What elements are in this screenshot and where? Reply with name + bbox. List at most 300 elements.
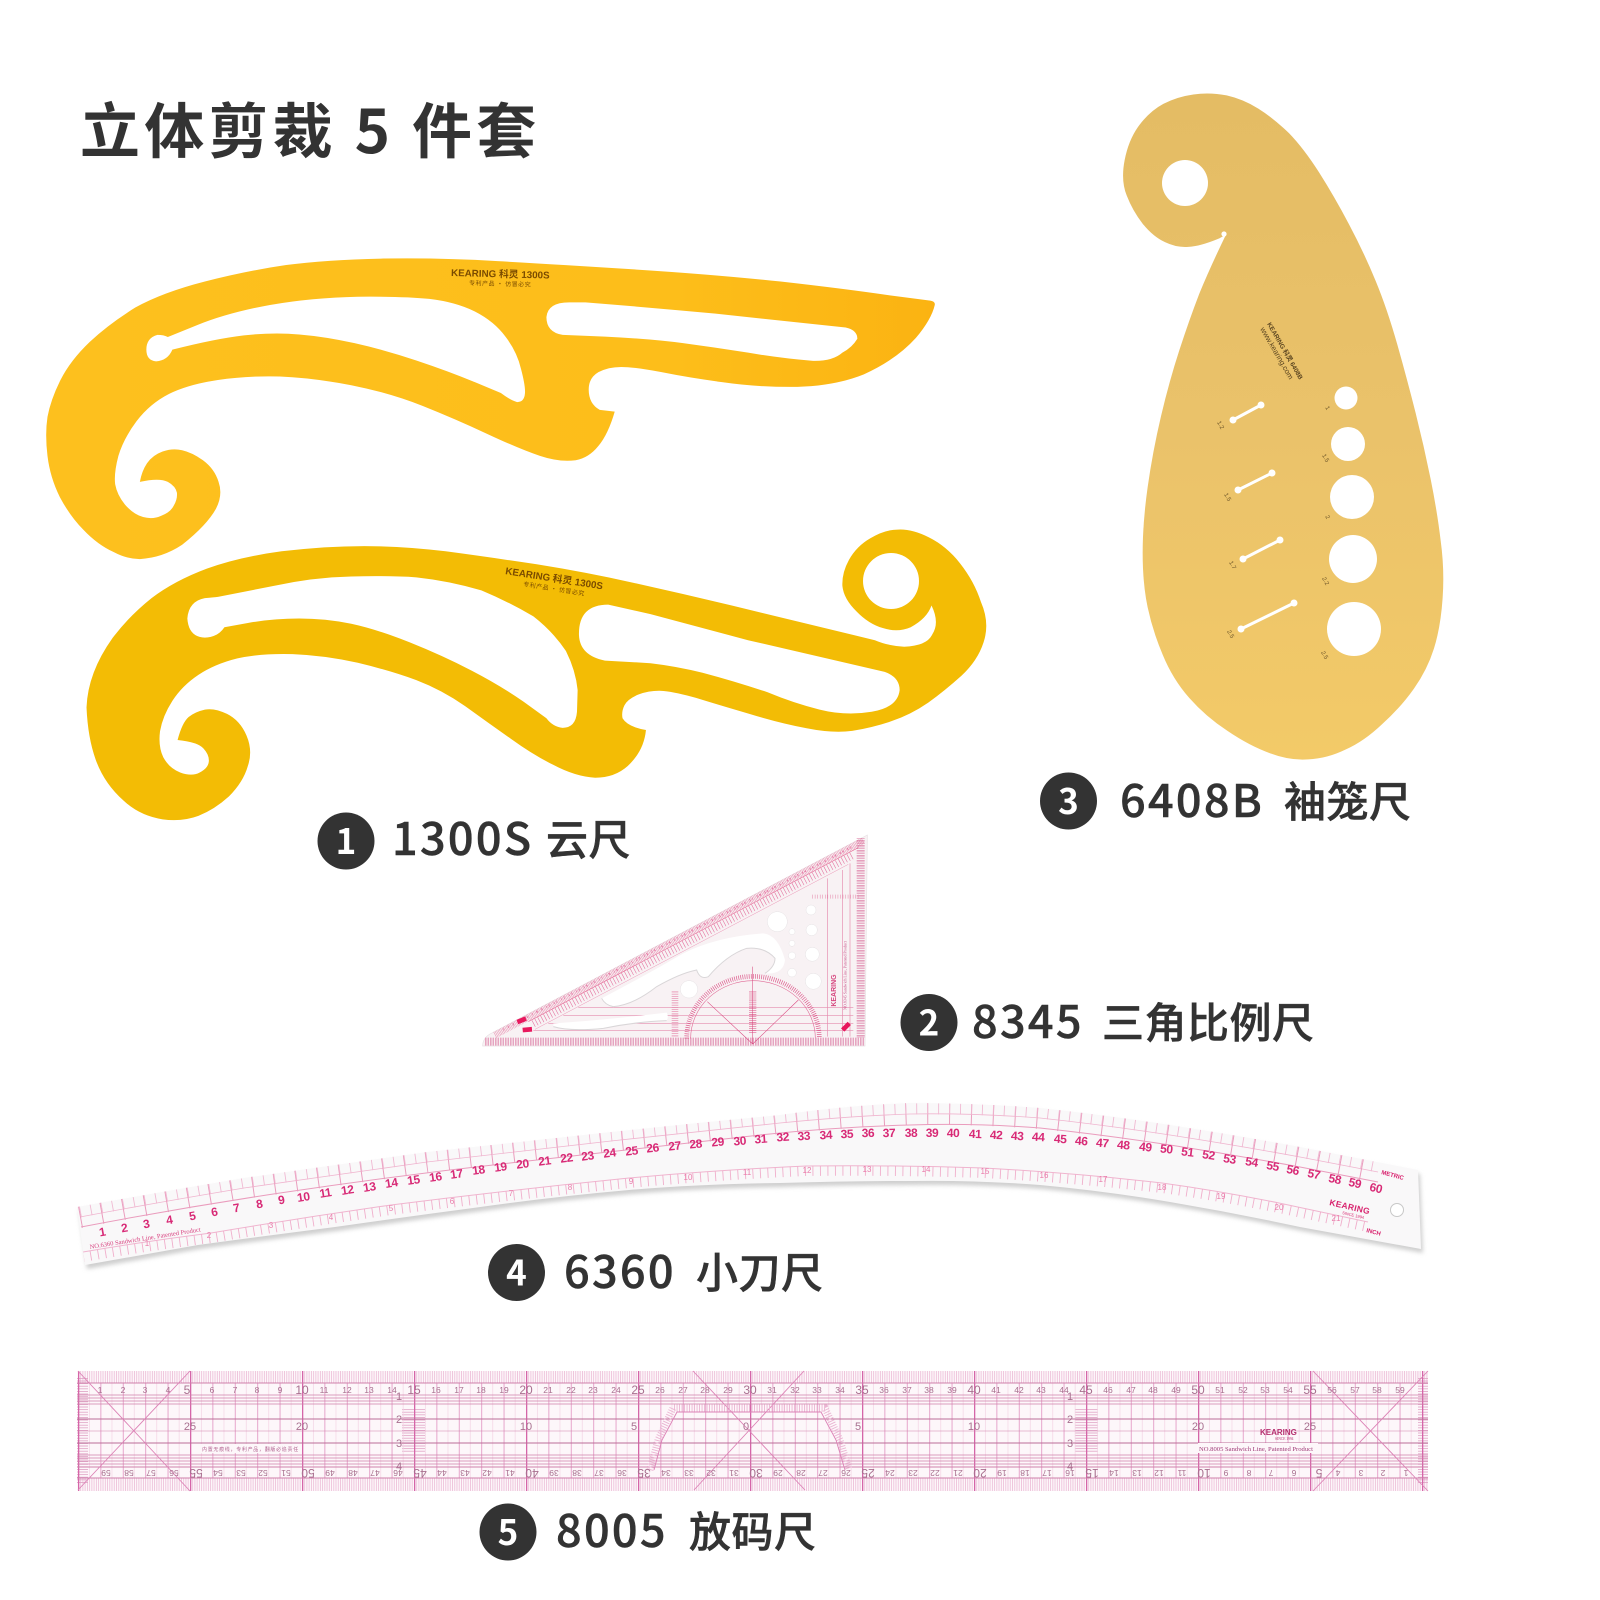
size labels: 2.2 bbox=[1320, 576, 1330, 587]
top numbers: 7 bbox=[233, 1385, 238, 1395]
centimetre numbers: 25 bbox=[625, 1143, 639, 1159]
inch numbers: 19 bbox=[1217, 1192, 1226, 1201]
top numbers: 44 bbox=[1059, 1385, 1069, 1395]
bottom inverted numbers: 15 bbox=[1085, 1466, 1099, 1480]
top numbers: 21 bbox=[543, 1385, 553, 1395]
inch numbers: 4 bbox=[329, 1213, 334, 1222]
middle inch numbers: 3 bbox=[1067, 1438, 1073, 1450]
centimetre numbers: 9 bbox=[277, 1192, 286, 1207]
bottom inverted numbers bbox=[101, 1466, 1408, 1480]
label 4: 小刀尺 bbox=[696, 1240, 824, 1301]
centimetre numbers: 38 bbox=[905, 1126, 918, 1140]
centimetre numbers: 33 bbox=[797, 1129, 811, 1143]
bottom inverted numbers: 55 bbox=[189, 1466, 203, 1480]
inch numbers: 15 bbox=[981, 1167, 990, 1176]
ring hole bbox=[863, 553, 919, 609]
label 2 bbox=[900, 986, 1315, 1051]
inch numbers: 20 bbox=[1275, 1203, 1284, 1212]
top numbers: 17 bbox=[454, 1385, 464, 1395]
bottom inverted numbers: 32 bbox=[706, 1468, 716, 1478]
top numbers: 13 bbox=[364, 1385, 374, 1395]
model text: NO.8345 Sandwich Line, Patented Product bbox=[843, 940, 849, 1010]
centimetre numbers: 50 bbox=[1159, 1141, 1174, 1157]
top numbers: 6 bbox=[210, 1385, 215, 1395]
top numbers: 32 bbox=[790, 1385, 800, 1395]
since text: SINCE 1994 bbox=[1342, 1210, 1365, 1220]
bottom inverted numbers: 11 bbox=[1177, 1468, 1186, 1478]
middle inch numbers: 4 bbox=[396, 1461, 402, 1473]
title: 立体剪裁 5 件套 bbox=[80, 84, 540, 171]
middle inch numbers: 5 bbox=[631, 1421, 637, 1433]
inch numbers bbox=[145, 1165, 1341, 1248]
top numbers: 14 bbox=[387, 1385, 397, 1395]
middle inch numbers: 10 bbox=[520, 1421, 532, 1433]
middle inch numbers: 3 bbox=[396, 1438, 402, 1450]
top numbers: 4 bbox=[166, 1385, 171, 1395]
website text: www.kearing.com bbox=[1258, 325, 1295, 381]
top numbers: 15 bbox=[407, 1383, 421, 1397]
top numbers: 36 bbox=[879, 1385, 889, 1395]
bottom inverted numbers: 50 bbox=[301, 1466, 315, 1480]
top numbers bbox=[98, 1383, 1405, 1397]
bottom inverted numbers: 37 bbox=[594, 1468, 604, 1478]
label 3: 6408B bbox=[1120, 765, 1264, 830]
protractor bbox=[650, 1408, 849, 1470]
centimetre numbers: 58 bbox=[1327, 1171, 1343, 1187]
centimetre numbers: 1 bbox=[98, 1224, 107, 1239]
size labels: 1.5 bbox=[1320, 453, 1330, 464]
label 5: 5 bbox=[498, 1505, 518, 1556]
bottom inverted numbers: 28 bbox=[796, 1468, 806, 1478]
bottom inverted numbers: 5 bbox=[1315, 1466, 1322, 1480]
top numbers: 20 bbox=[519, 1383, 533, 1397]
bottom inverted numbers: 8 bbox=[1246, 1468, 1251, 1478]
size labels bbox=[1215, 406, 1331, 661]
label 5: 放码尺 bbox=[689, 1499, 817, 1560]
top numbers: 19 bbox=[499, 1385, 509, 1395]
top numbers: 42 bbox=[1014, 1385, 1024, 1395]
centimetre numbers: 42 bbox=[990, 1128, 1003, 1142]
centimetre numbers: 14 bbox=[384, 1175, 399, 1191]
centimetre numbers: 21 bbox=[537, 1153, 552, 1169]
centimetre numbers: 13 bbox=[362, 1179, 377, 1195]
label 1: 云尺 bbox=[546, 807, 631, 868]
inch numbers: 10 bbox=[684, 1173, 693, 1182]
bottom inverted numbers: 36 bbox=[617, 1468, 627, 1478]
shadow bbox=[79, 1107, 1423, 1269]
centimetre numbers: 36 bbox=[862, 1126, 875, 1140]
centimetre numbers: 35 bbox=[840, 1127, 854, 1141]
centimetre numbers: 8 bbox=[255, 1196, 264, 1211]
centimetre numbers: 26 bbox=[646, 1140, 660, 1156]
top numbers: 9 bbox=[278, 1385, 283, 1395]
top numbers: 30 bbox=[743, 1383, 757, 1397]
size labels: 2.5 bbox=[1225, 629, 1235, 640]
centimetre numbers: 32 bbox=[776, 1130, 790, 1144]
top numbers: 37 bbox=[902, 1385, 912, 1395]
notch bbox=[1221, 231, 1227, 237]
centimetre numbers: 55 bbox=[1265, 1158, 1281, 1174]
label 2: 三角比例尺 bbox=[1102, 990, 1315, 1051]
caption on upper ruler: 专利产品 · 仿冒必究 bbox=[469, 278, 531, 289]
centimetre numbers: 44 bbox=[1032, 1130, 1046, 1144]
middle inch numbers: 10 bbox=[968, 1421, 980, 1433]
centimetre numbers: 29 bbox=[711, 1134, 725, 1150]
top numbers: 22 bbox=[566, 1385, 576, 1395]
inch numbers: 11 bbox=[743, 1168, 752, 1177]
panel: 8005 grading ruler bbox=[77, 1371, 1428, 1491]
top numbers: 1 bbox=[98, 1385, 103, 1395]
bottom inverted numbers: 17 bbox=[1042, 1468, 1052, 1478]
bottom inverted numbers: 14 bbox=[1109, 1468, 1119, 1478]
top numbers: 53 bbox=[1260, 1385, 1270, 1395]
size labels: 1 bbox=[1323, 406, 1331, 412]
top numbers: 51 bbox=[1215, 1385, 1225, 1395]
centimetre numbers: 24 bbox=[602, 1145, 617, 1161]
bottom inverted numbers: 48 bbox=[348, 1468, 358, 1478]
bottom inverted numbers: 30 bbox=[749, 1466, 763, 1480]
inch numbers: 5 bbox=[389, 1204, 394, 1213]
top numbers: 40 bbox=[967, 1383, 981, 1397]
centimetre numbers bbox=[98, 1126, 1384, 1239]
bottom inverted numbers: 29 bbox=[773, 1468, 783, 1478]
top numbers: 38 bbox=[924, 1385, 934, 1395]
top numbers: 43 bbox=[1036, 1385, 1046, 1395]
centimetre numbers: 28 bbox=[689, 1136, 703, 1152]
top numbers: 10 bbox=[295, 1383, 309, 1397]
bottom inverted numbers: 25 bbox=[861, 1466, 875, 1480]
top numbers: 41 bbox=[991, 1385, 1001, 1395]
centimetre numbers: 30 bbox=[733, 1134, 747, 1148]
centimetre numbers: 2 bbox=[120, 1220, 129, 1235]
centimetre numbers: 53 bbox=[1222, 1151, 1238, 1167]
brand text: KEARING 科灵 6408B bbox=[1265, 320, 1306, 381]
bottom inverted numbers: 56 bbox=[169, 1468, 179, 1478]
inch numbers: 17 bbox=[1099, 1175, 1108, 1184]
bottom inverted numbers: 40 bbox=[525, 1466, 539, 1480]
top numbers: 28 bbox=[700, 1385, 710, 1395]
top numbers: 58 bbox=[1372, 1385, 1382, 1395]
inch numbers: 16 bbox=[1040, 1171, 1049, 1180]
top numbers: 52 bbox=[1238, 1385, 1248, 1395]
top numbers: 11 bbox=[320, 1385, 329, 1395]
centimetre numbers: 10 bbox=[296, 1189, 311, 1205]
brand text on lower ruler: KEARING 科灵 1300S bbox=[505, 564, 604, 592]
triangle body bbox=[483, 835, 867, 1046]
bottom inverted numbers: 6 bbox=[1291, 1468, 1296, 1478]
label 2: 2 bbox=[919, 996, 939, 1046]
middle inch numbers bbox=[184, 1391, 1316, 1473]
label 3: 袖笼尺 bbox=[1284, 769, 1412, 830]
bottom inverted numbers: 52 bbox=[258, 1468, 268, 1478]
panel: 8345 triangle scale ruler bbox=[482, 834, 868, 1046]
bottom inverted numbers: 13 bbox=[1132, 1468, 1142, 1478]
inch label: INCH bbox=[1365, 1228, 1381, 1238]
centimetre numbers: 46 bbox=[1075, 1134, 1089, 1148]
panel: 6360 curved ruler bbox=[77, 1103, 1423, 1269]
centimetre numbers: 22 bbox=[559, 1150, 574, 1166]
top numbers: 39 bbox=[947, 1385, 957, 1395]
top numbers: 49 bbox=[1171, 1385, 1181, 1395]
inch numbers: 8 bbox=[568, 1183, 573, 1192]
label 1: 1300S bbox=[392, 803, 533, 868]
brand text: KEARING bbox=[1329, 1197, 1371, 1216]
inch numbers: 14 bbox=[922, 1165, 931, 1174]
metric and inch scales bbox=[80, 1109, 1378, 1257]
bottom inverted numbers: 54 bbox=[213, 1468, 223, 1478]
inch numbers: 1 bbox=[145, 1239, 150, 1248]
top numbers: 18 bbox=[476, 1385, 486, 1395]
centimetre numbers: 54 bbox=[1244, 1154, 1260, 1170]
top numbers: 34 bbox=[835, 1385, 845, 1395]
centimetre numbers: 4 bbox=[165, 1212, 174, 1227]
panel: lower 1300S curve ruler bbox=[87, 530, 986, 820]
inch numbers: 13 bbox=[863, 1165, 872, 1174]
size labels: 1.7 bbox=[1227, 560, 1237, 571]
centimetre numbers: 41 bbox=[969, 1127, 982, 1141]
top numbers: 5 bbox=[184, 1383, 191, 1397]
top numbers: 59 bbox=[1395, 1385, 1405, 1395]
top numbers: 55 bbox=[1303, 1383, 1317, 1397]
cutout shadows bbox=[553, 948, 775, 1030]
centimetre numbers: 6 bbox=[210, 1204, 219, 1219]
red marks bbox=[516, 1016, 851, 1032]
top numbers: 35 bbox=[855, 1383, 869, 1397]
panel: 6408B armhole ruler bbox=[1123, 93, 1443, 760]
centimetre numbers: 37 bbox=[883, 1126, 896, 1140]
bottom inverted numbers: 27 bbox=[818, 1468, 828, 1478]
bottom inverted numbers: 12 bbox=[1154, 1468, 1164, 1478]
bottom inverted numbers: 43 bbox=[460, 1468, 470, 1478]
centimetre numbers: 16 bbox=[428, 1169, 443, 1185]
label 1 bbox=[318, 803, 631, 870]
top numbers: 8 bbox=[255, 1385, 260, 1395]
ruler model text: NO.6360 Sandwich Line, Patented Product bbox=[89, 1226, 201, 1251]
bottom inverted numbers: 34 bbox=[661, 1468, 671, 1478]
scale lines bbox=[533, 863, 853, 1037]
centimetre numbers: 39 bbox=[926, 1126, 939, 1140]
centimetre numbers: 34 bbox=[819, 1128, 833, 1142]
top numbers: 3 bbox=[143, 1385, 148, 1395]
brand text: KEARING bbox=[831, 974, 838, 1007]
inch numbers: 18 bbox=[1158, 1183, 1167, 1192]
round holes bbox=[680, 905, 821, 998]
bottom inverted numbers: 53 bbox=[236, 1468, 246, 1478]
top numbers: 23 bbox=[588, 1385, 598, 1395]
centimetre numbers: 49 bbox=[1138, 1139, 1153, 1155]
size labels: 1.5 bbox=[1222, 492, 1232, 503]
bottom inverted numbers: 49 bbox=[325, 1468, 335, 1478]
bottom inverted numbers: 57 bbox=[146, 1468, 156, 1478]
centimetre numbers: 17 bbox=[449, 1166, 464, 1182]
top numbers: 50 bbox=[1191, 1383, 1205, 1397]
label 4: 4 bbox=[506, 1246, 527, 1296]
hypotenuse scales bbox=[485, 838, 865, 1042]
top numbers: 46 bbox=[1103, 1385, 1113, 1395]
size labels: 2.5 bbox=[1319, 650, 1329, 661]
middle inch numbers: 25 bbox=[184, 1421, 196, 1433]
inch numbers: 21 bbox=[1332, 1214, 1341, 1223]
bottom inverted numbers: 22 bbox=[930, 1468, 940, 1478]
label 3: 3 bbox=[1058, 774, 1079, 825]
bottom inverted numbers: 51 bbox=[281, 1468, 291, 1478]
top numbers: 2 bbox=[121, 1385, 126, 1395]
bottom inverted numbers: 59 bbox=[101, 1468, 111, 1478]
centimetre numbers: 7 bbox=[232, 1200, 241, 1215]
bottom inverted numbers: 3 bbox=[1358, 1468, 1363, 1478]
bottom inverted numbers: 24 bbox=[885, 1468, 895, 1478]
label 1: 1 bbox=[336, 814, 356, 865]
centimetre numbers: 19 bbox=[493, 1159, 508, 1175]
top numbers: 25 bbox=[631, 1383, 645, 1397]
ruler body bbox=[77, 1103, 1421, 1265]
chinese note: 内置无痕线，专利产品，翻版必追责任 bbox=[202, 1446, 299, 1453]
inch numbers: 12 bbox=[803, 1166, 812, 1175]
inch numbers: 6 bbox=[450, 1197, 455, 1206]
brand text on upper ruler: KEARING 科灵 1300S bbox=[451, 266, 550, 282]
middle inch numbers: 20 bbox=[1192, 1421, 1204, 1433]
caption on lower ruler: 专利产品 · 仿冒必究 bbox=[523, 579, 586, 598]
ruler body bbox=[77, 1371, 1428, 1491]
centimetre numbers: 59 bbox=[1347, 1175, 1363, 1191]
bottom inverted numbers: 42 bbox=[482, 1468, 492, 1478]
metric label: METRIC bbox=[1380, 1170, 1405, 1182]
centimetre numbers: 56 bbox=[1285, 1162, 1301, 1178]
top numbers: 45 bbox=[1079, 1383, 1093, 1397]
bottom inverted numbers: 26 bbox=[841, 1468, 851, 1478]
curve cutouts bbox=[553, 933, 785, 1030]
label 5: 8005 bbox=[556, 1495, 668, 1560]
since text: SINCE 1994 bbox=[1275, 1437, 1294, 1441]
centimetre numbers: 52 bbox=[1201, 1147, 1216, 1163]
bottom inverted numbers: 23 bbox=[908, 1468, 918, 1478]
round holes bbox=[1327, 386, 1381, 656]
model text: NO.8005 Sandwich Line, Patented Product bbox=[1199, 1446, 1313, 1453]
bottom inverted numbers: 41 bbox=[505, 1468, 515, 1478]
centimetre numbers: 40 bbox=[947, 1126, 960, 1140]
protractor bbox=[675, 967, 819, 1044]
middle inch numbers: 1 bbox=[1067, 1391, 1073, 1403]
bottom inverted numbers: 10 bbox=[1197, 1466, 1211, 1480]
bottom inverted numbers: 9 bbox=[1223, 1468, 1228, 1478]
label 5 bbox=[480, 1495, 817, 1560]
top numbers: 56 bbox=[1327, 1385, 1337, 1395]
top numbers: 33 bbox=[812, 1385, 822, 1395]
bottom inverted numbers: 31 bbox=[729, 1468, 739, 1478]
inch numbers: 2 bbox=[207, 1231, 212, 1240]
centimetre numbers: 31 bbox=[754, 1132, 768, 1146]
bottom inverted numbers: 1 bbox=[1403, 1468, 1408, 1478]
top numbers: 47 bbox=[1126, 1385, 1136, 1395]
centimetre numbers: 20 bbox=[515, 1156, 530, 1172]
bottom inverted numbers: 16 bbox=[1065, 1468, 1075, 1478]
slot lines bbox=[1231, 403, 1296, 631]
bottom inverted numbers: 21 bbox=[953, 1468, 963, 1478]
label 2: 8345 bbox=[972, 986, 1084, 1051]
bottom inverted numbers: 33 bbox=[684, 1468, 694, 1478]
panel: upper 1300S curve ruler bbox=[46, 258, 935, 559]
diagonal crosses bbox=[78, 1371, 1428, 1491]
centimetre numbers: 18 bbox=[471, 1162, 486, 1178]
middle inch numbers: 25 bbox=[1304, 1421, 1316, 1433]
centimetre numbers: 60 bbox=[1368, 1180, 1384, 1196]
hypotenuse numbers: 1 2 3 4 5 6 7 8 9 10 11 12 13 14 15 16 17 18 19 20 21 22 23 24 25 26 27 28 29 30 31 32 33 34 35 36 37 38 39 40 41 42 43 44 45 46 47 48 49 50 bbox=[502, 846, 852, 1030]
size labels: 2 bbox=[1323, 515, 1331, 521]
top numbers: 24 bbox=[611, 1385, 621, 1395]
brand text: KEARING bbox=[1260, 1428, 1297, 1437]
top numbers: 26 bbox=[655, 1385, 665, 1395]
white strip note bbox=[200, 1444, 292, 1453]
centimetre numbers: 15 bbox=[406, 1172, 421, 1188]
bottom inverted numbers: 20 bbox=[973, 1466, 987, 1480]
top numbers: 27 bbox=[678, 1385, 688, 1395]
centimetre numbers: 48 bbox=[1116, 1137, 1131, 1153]
bottom inverted numbers: 45 bbox=[413, 1466, 427, 1480]
centimetre numbers: 57 bbox=[1306, 1166, 1322, 1182]
middle inch numbers: 4 bbox=[1067, 1461, 1073, 1473]
middle inch numbers: 2 bbox=[396, 1414, 402, 1426]
centimetre numbers: 45 bbox=[1054, 1132, 1068, 1146]
bottom inverted numbers: 44 bbox=[437, 1468, 447, 1478]
top numbers: 31 bbox=[767, 1385, 777, 1395]
bottom inverted numbers: 19 bbox=[997, 1468, 1007, 1478]
label 3 bbox=[1040, 765, 1412, 830]
bottom inverted numbers: 47 bbox=[370, 1468, 380, 1478]
inch numbers: 9 bbox=[629, 1177, 634, 1186]
bottom inverted numbers: 39 bbox=[549, 1468, 559, 1478]
bottom inverted numbers: 38 bbox=[572, 1468, 582, 1478]
middle inch numbers: 20 bbox=[296, 1421, 308, 1433]
centimetre numbers: 51 bbox=[1180, 1144, 1195, 1160]
centimetre numbers: 47 bbox=[1095, 1135, 1110, 1151]
label 4: 6360 bbox=[564, 1236, 676, 1301]
middle inch numbers: 5 bbox=[855, 1421, 861, 1433]
top numbers: 29 bbox=[723, 1385, 733, 1395]
middle inch numbers: 1 bbox=[396, 1391, 402, 1403]
head hole bbox=[1162, 160, 1208, 206]
bottom inverted numbers: 46 bbox=[393, 1468, 403, 1478]
inch numbers: 3 bbox=[269, 1221, 274, 1230]
bottom inverted numbers: 4 bbox=[1335, 1468, 1340, 1478]
centimetre numbers: 43 bbox=[1011, 1129, 1025, 1143]
centimetre numbers: 11 bbox=[318, 1185, 333, 1201]
tick bands bbox=[77, 1371, 1428, 1491]
bottom inverted numbers: 35 bbox=[637, 1466, 651, 1480]
top numbers: 57 bbox=[1350, 1385, 1360, 1395]
hang hole bbox=[1390, 1204, 1404, 1216]
bottom inverted numbers: 58 bbox=[124, 1468, 134, 1478]
centimetre numbers: 23 bbox=[580, 1148, 595, 1164]
top numbers: 48 bbox=[1148, 1385, 1158, 1395]
top numbers: 16 bbox=[431, 1385, 441, 1395]
bottom inverted numbers: 7 bbox=[1268, 1468, 1273, 1478]
grid lines bbox=[77, 1371, 1428, 1491]
top numbers: 54 bbox=[1283, 1385, 1293, 1395]
label 4 bbox=[488, 1236, 824, 1301]
centimetre numbers: 27 bbox=[668, 1138, 682, 1154]
middle inch numbers: 0 bbox=[743, 1421, 749, 1433]
centimetre numbers: 3 bbox=[142, 1216, 151, 1231]
white strip model bbox=[1198, 1443, 1318, 1453]
centimetre numbers: 5 bbox=[188, 1208, 197, 1223]
bottom inverted numbers: 2 bbox=[1380, 1468, 1385, 1478]
bottom inverted numbers: 18 bbox=[1020, 1468, 1030, 1478]
size labels: 1.2 bbox=[1215, 420, 1225, 431]
centimetre numbers: 12 bbox=[340, 1182, 355, 1198]
middle inch numbers: 2 bbox=[1067, 1414, 1073, 1426]
top numbers: 12 bbox=[342, 1385, 352, 1395]
inch numbers: 7 bbox=[509, 1189, 514, 1198]
